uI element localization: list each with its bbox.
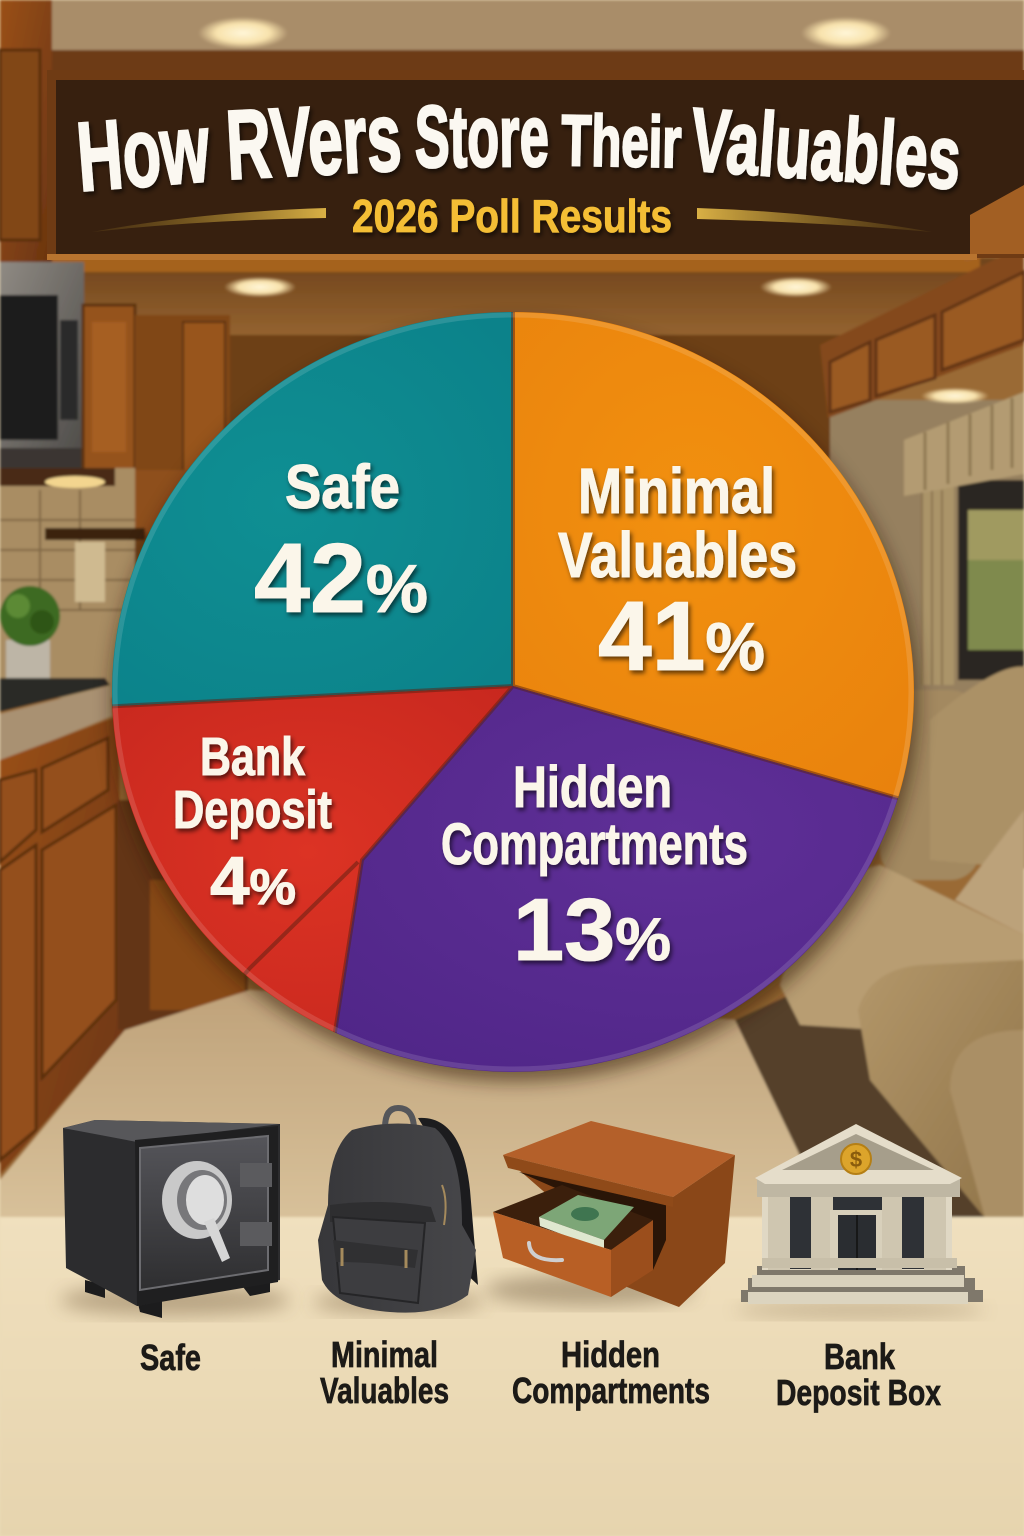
columns (768, 1197, 946, 1270)
ceiling with lamps (0, 0, 1024, 52)
title text: Their (561, 101, 682, 183)
icon labels (140, 1334, 941, 1413)
title text: How (73, 92, 214, 212)
slices (112, 312, 914, 1072)
upper wood beam (0, 50, 1024, 80)
label: minimal valuables (320, 1334, 449, 1411)
slice: safe 42% (112, 312, 513, 706)
drawer front (493, 1212, 611, 1297)
curtain and window (904, 392, 1024, 685)
label: safe: Safe (140, 1337, 201, 1378)
plant (0, 586, 60, 678)
bottom cream surface (0, 1217, 1024, 1536)
pie chart (101, 312, 929, 1094)
slice: minimal valuables 41% (513, 312, 914, 798)
title text: Store (414, 86, 549, 186)
banner board (47, 70, 1024, 258)
rear wall of cabinets (130, 335, 840, 755)
label: hidden compartments (441, 755, 748, 979)
label: hidden compartments: 13% (513, 880, 671, 979)
microwave (0, 262, 84, 468)
label: hidden compartments: Compartments (441, 812, 748, 877)
label: hidden compartments: Hidden (513, 755, 672, 820)
label: bank deposit box: Bank (824, 1336, 896, 1377)
slice: bank deposit 4% (112, 686, 513, 1032)
label: hidden compartments: Hidden (561, 1334, 660, 1375)
label: minimal valuables: 41% (598, 581, 765, 691)
icon: backpack (313, 1108, 483, 1314)
gold flourish left (92, 208, 326, 232)
label: minimal valuables: Minimal (578, 455, 775, 527)
label: minimal valuables: Minimal (331, 1334, 438, 1375)
label: hidden compartments: Compartments (512, 1370, 710, 1411)
label: minimal valuables: Valuables (558, 519, 797, 591)
label: bank deposit: Deposit (173, 780, 332, 840)
label: safe: 42% (254, 523, 428, 633)
right wall (830, 400, 1024, 720)
title text: RVers (223, 81, 404, 200)
label: safe: Safe (285, 453, 400, 522)
lower cabinets (0, 716, 248, 1175)
title text (73, 81, 964, 212)
carpet floor (0, 990, 830, 1220)
label: safe (254, 453, 428, 633)
stove and counter (0, 678, 112, 762)
cabinet beside microwave (48, 305, 230, 535)
label: bank deposit box (776, 1336, 941, 1413)
sofa (735, 667, 1024, 1218)
label: hidden compartments (512, 1334, 710, 1411)
dial (162, 1161, 232, 1239)
pie shadow (112, 322, 918, 1082)
upper left cabinet (0, 0, 52, 262)
icon: hidden drawer with cash (485, 1121, 735, 1307)
lower ceiling (50, 256, 1024, 348)
label: bank deposit: 4% (210, 843, 296, 919)
label: bank deposit (173, 727, 332, 919)
drawer interior (493, 1185, 653, 1250)
label: bank deposit: Bank (200, 727, 306, 787)
icon: safe (60, 1120, 290, 1318)
label: bank deposit box: Deposit Box (776, 1372, 941, 1413)
backsplash (0, 468, 145, 698)
pediment (755, 1124, 962, 1184)
gold flourish right (697, 208, 932, 232)
subtitle: 2026 Poll Results (352, 190, 672, 242)
upper right cabinets (820, 185, 1024, 418)
label: minimal valuables (558, 455, 797, 691)
slice edges (112, 312, 898, 1034)
slice: hidden compartments 13% (335, 686, 898, 1072)
label: minimal valuables: Valuables (320, 1370, 449, 1411)
cash stack (539, 1195, 634, 1240)
icon: bank (735, 1124, 985, 1318)
title banner (47, 70, 1024, 260)
icon: bank: $ (850, 1147, 862, 1172)
